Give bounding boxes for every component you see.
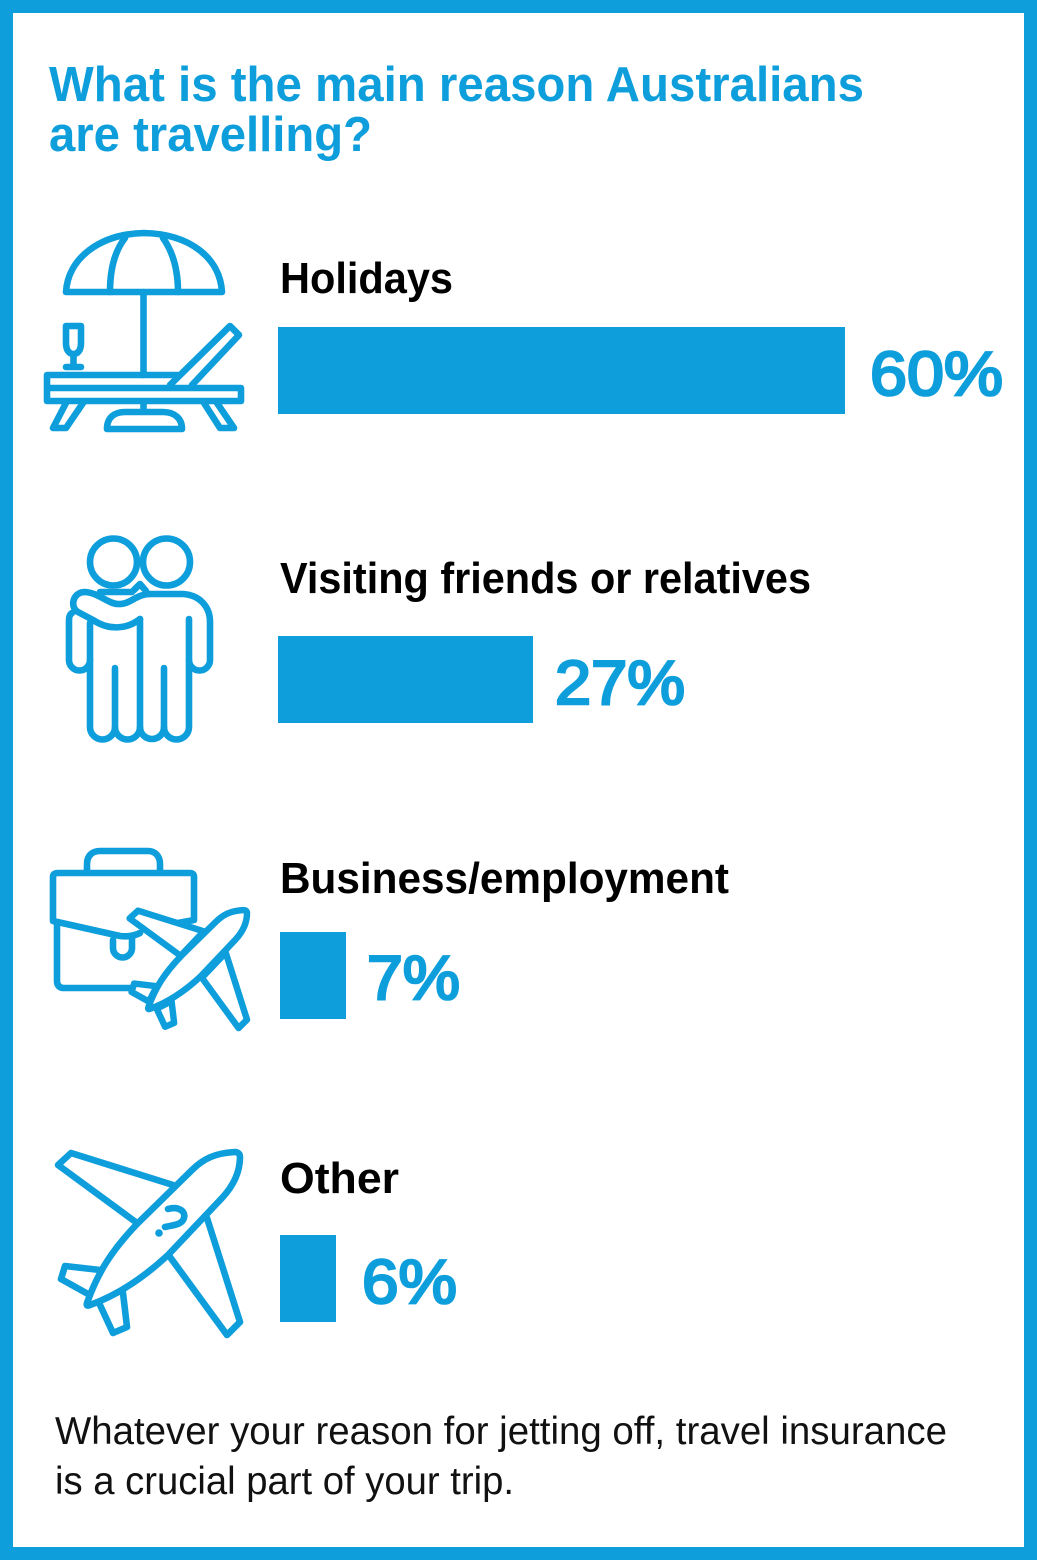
bar: visiting friends or relatives: [278, 636, 533, 723]
closing note: Whatever your reason for jetting off, travel insurance: [55, 1410, 947, 1453]
title: [49, 58, 864, 162]
bar: business/employment: [280, 932, 346, 1019]
title: are travelling?: [49, 108, 372, 162]
value: 6%: 6%: [362, 1248, 457, 1317]
label: business/employment: Business/employment: [280, 854, 729, 903]
label: other: Other: [280, 1154, 399, 1203]
value: 60%: 60%: [870, 340, 1003, 409]
icon: beach umbrella and lounger: [47, 233, 241, 429]
icon: plane with question mark: [58, 1152, 240, 1335]
label: holidays: Holidays: [280, 254, 453, 303]
closing note: is a crucial part of your trip.: [55, 1460, 514, 1503]
bar: other: [280, 1235, 336, 1322]
bar: holidays: [278, 327, 845, 414]
icon: two friends embracing: [69, 538, 210, 740]
label: visiting friends or relatives: Visiting friends or relatives: [280, 554, 811, 603]
value: 7%: 7%: [367, 944, 460, 1013]
title: What is the main reason Australians: [49, 58, 864, 112]
closing note: [55, 1410, 947, 1503]
value: 27%: 27%: [555, 649, 685, 718]
icon: briefcase and plane: [53, 851, 247, 1028]
